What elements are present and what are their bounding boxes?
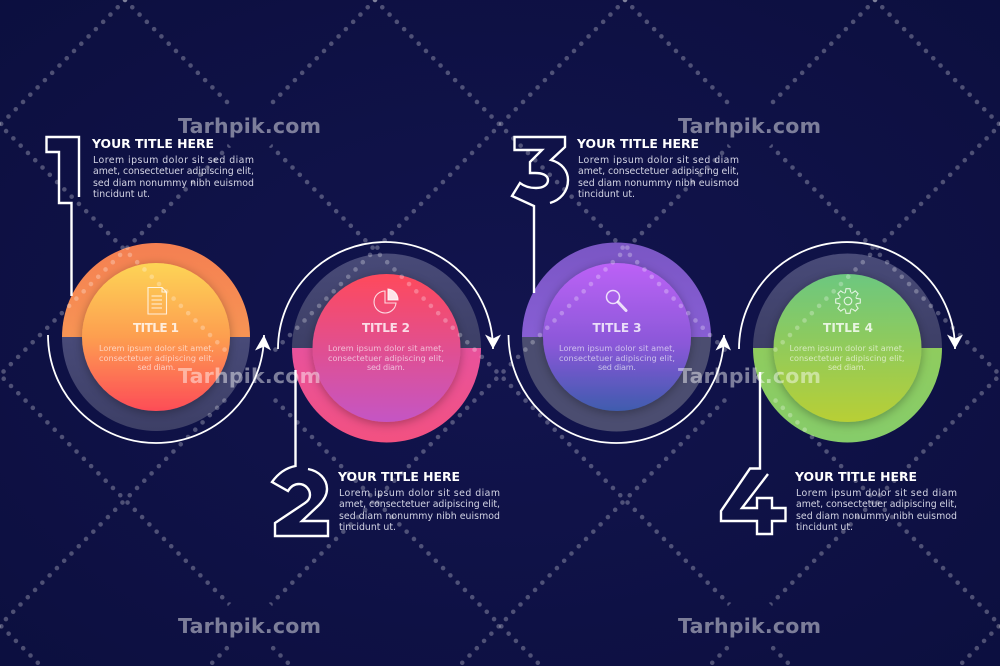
number 3 outline bbox=[512, 137, 568, 293]
number 4 outline bbox=[721, 372, 786, 534]
text block 2 bbox=[337, 469, 500, 533]
circle 4 text: sed diam. bbox=[828, 362, 866, 372]
text block 4: amet, consectetuer adipiscing elit, bbox=[796, 499, 957, 510]
text block 3: Lorem ipsum dolor sit sed diam bbox=[578, 155, 739, 166]
arrow: around circle 3 bbox=[508, 335, 731, 443]
icon: pie chart bbox=[374, 289, 398, 313]
circle 4 title: TITLE 4 bbox=[823, 321, 873, 335]
icon: magnifier bbox=[606, 290, 626, 310]
text block 4: tincidunt ut. bbox=[796, 522, 853, 533]
watermark text: Tarhpik.com bbox=[678, 114, 821, 138]
watermark text: Tarhpik.com bbox=[178, 614, 321, 638]
text block 2: sed diam nonummy nibh euismod bbox=[339, 511, 500, 522]
text block 4: Lorem ipsum dolor sit sed diam bbox=[796, 488, 957, 499]
text block 1: YOUR TITLE HERE bbox=[91, 136, 214, 151]
text block 2: amet, consectetuer adipiscing elit, bbox=[339, 499, 500, 510]
text block 2: tincidunt ut. bbox=[339, 522, 396, 533]
circle 2 title: TITLE 2 bbox=[362, 321, 410, 335]
text block 4: sed diam nonummy nibh euismod bbox=[796, 511, 957, 522]
number 2 outline bbox=[272, 370, 328, 536]
circle 2 text: consectetuer adipiscing elit, bbox=[328, 353, 444, 363]
watermark text: Tarhpik.com bbox=[178, 114, 321, 138]
watermark text: Tarhpik.com bbox=[178, 364, 321, 388]
watermark text: Tarhpik.com bbox=[678, 614, 821, 638]
arrow: around circle 4 bbox=[739, 242, 963, 349]
text block 1: amet, consectetuer adipiscing elit, bbox=[93, 166, 254, 177]
text block 1: sed diam nonummy nibh euismod bbox=[93, 178, 254, 189]
circle 1 text: consectetuer adipiscing elit, bbox=[99, 353, 214, 363]
text block 1: tincidunt ut. bbox=[93, 189, 150, 200]
arrow: around circle 2 bbox=[278, 242, 501, 349]
text block 3: amet, consectetuer adipiscing elit, bbox=[578, 166, 739, 177]
text block 2: Lorem ipsum dolor sit sed diam bbox=[339, 488, 500, 499]
text block 3: YOUR TITLE HERE bbox=[576, 136, 699, 151]
circle 1 text: sed diam. bbox=[138, 362, 176, 372]
circle 4 text bbox=[790, 343, 904, 372]
text block 1: Lorem ipsum dolor sit sed diam bbox=[93, 155, 254, 166]
circle 4 text: Lorem ipsum dolor sit amet, bbox=[790, 343, 904, 353]
text block 3: tincidunt ut. bbox=[578, 189, 635, 200]
circle 1 text bbox=[99, 343, 214, 372]
text block 4 bbox=[794, 469, 957, 533]
step 1 circle bbox=[62, 243, 250, 431]
circle 2 text bbox=[328, 343, 444, 372]
watermark text bbox=[178, 114, 821, 638]
step 4 circle bbox=[753, 253, 942, 442]
circle 4 text: consectetuer adipiscing elit, bbox=[790, 353, 904, 363]
step 3 circle bbox=[522, 242, 711, 431]
circle 1 text: Lorem ipsum dolor sit amet, bbox=[99, 343, 214, 353]
number 1 outline bbox=[46, 137, 79, 296]
step 2 circle bbox=[292, 254, 481, 442]
text block 2: YOUR TITLE HERE bbox=[337, 469, 460, 484]
arrow: around circle 1 bbox=[48, 335, 271, 443]
circle 3 text: sed diam. bbox=[598, 362, 636, 372]
circle 1 title: TITLE 1 bbox=[133, 321, 179, 335]
icon: document bbox=[148, 288, 166, 314]
text block 3: sed diam nonummy nibh euismod bbox=[578, 178, 739, 189]
circle 3 title: TITLE 3 bbox=[592, 321, 642, 335]
text block 4: YOUR TITLE HERE bbox=[794, 469, 917, 484]
circle 3 text: consectetuer adipiscing elit, bbox=[559, 353, 675, 363]
text block 3 bbox=[576, 136, 739, 200]
circle 2 text: sed diam. bbox=[367, 362, 405, 372]
circle 3 text bbox=[559, 343, 675, 372]
circle 3 text: Lorem ipsum dolor sit amet, bbox=[559, 343, 675, 353]
watermark text: Tarhpik.com bbox=[678, 364, 821, 388]
circle 2 text: Lorem ipsum dolor sit amet, bbox=[328, 343, 444, 353]
icon: gear bbox=[836, 289, 860, 313]
text block 1 bbox=[91, 136, 254, 200]
